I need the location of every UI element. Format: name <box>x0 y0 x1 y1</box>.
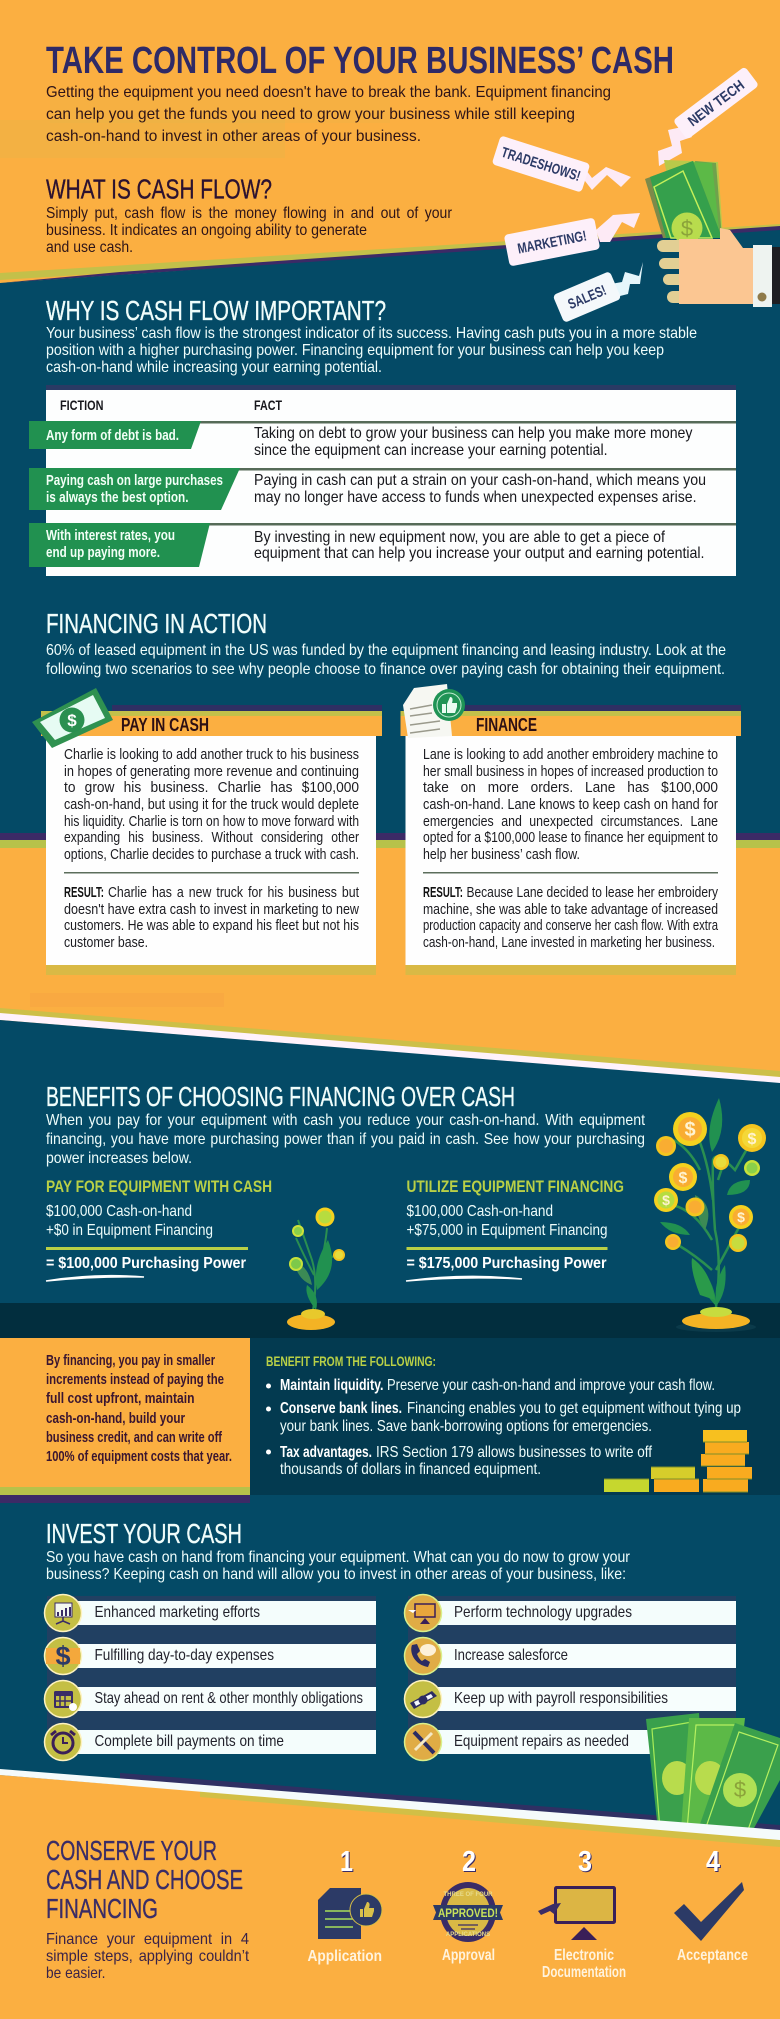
step 3: electronic documentation <box>538 1846 626 1981</box>
row 2: Paying in cash can put a strain on your cash-on-hand, which means you <box>254 472 706 489</box>
bubble: tradeshows <box>492 135 631 193</box>
illustration: three dollar bills <box>646 1713 780 1830</box>
calc: utilize equipment financing: = $175,000 Purchasing Power <box>406 1255 606 1272</box>
item: marketing <box>44 1594 260 1632</box>
text: why cash flow important: Your business’ cash flow is the strongest indicator of its success. Having cash puts you in a more stable <box>46 325 697 342</box>
calc: pay for equipment with cash: PAY FOR EQUIPMENT WITH CASH <box>46 1177 272 1196</box>
step 3: electronic documentation: 3 <box>578 1846 592 1878</box>
item: expenses: $ <box>55 1641 71 1671</box>
step 1: application: Application <box>308 1948 382 1965</box>
bullet: conserve bank lines: Conserve bank lines. <box>280 1400 402 1417</box>
row 2: is always the best option. <box>46 489 188 506</box>
bullet: tax advantages: Tax advantages. <box>280 1444 372 1461</box>
bullet: conserve bank lines <box>266 1400 741 1435</box>
icon: dollar bill: $ <box>67 711 77 730</box>
scenario text: cash-on-hand. Lane knows to keep cash on hand for <box>423 796 718 813</box>
bubble: sales <box>553 262 643 323</box>
bullet: maintain liquidity: Maintain liquidity. <box>280 1377 384 1394</box>
scenario text: to grow his business. Charlie has $100,000 <box>64 779 359 796</box>
result text: machine, she was able to take advantage of increased <box>423 901 718 918</box>
text: benefits intro <box>46 1112 646 1167</box>
panel: finance <box>400 684 741 975</box>
calc: utilize equipment financing: +$75,000 in Equipment Financing <box>406 1222 608 1239</box>
callout: by financing: business credit, and can write off <box>46 1429 223 1446</box>
text: why cash flow important <box>46 325 697 376</box>
calc: utilize equipment financing <box>406 1177 624 1281</box>
result text: Because Lane decided to lease her embroidery <box>466 884 718 901</box>
column headers: FACT <box>254 397 282 413</box>
item: bills <box>44 1724 284 1760</box>
icon: hand and cuff <box>657 228 780 307</box>
calc: utilize equipment financing: UTILIZE EQUIPMENT FINANCING <box>406 1177 624 1196</box>
step 2: approval: Approval <box>442 1947 495 1964</box>
row 2: may no longer have access to funds when unexpected expenses arise. <box>254 489 696 506</box>
step 2: approval: APPROVED! <box>438 1908 498 1920</box>
item: salesforce <box>404 1638 568 1674</box>
text: invest intro <box>46 1549 630 1583</box>
scenario text: Lane is looking to add another embroidery machine to <box>423 746 718 763</box>
item: technology <box>404 1594 632 1632</box>
bubble: new tech: NEW TECH <box>685 78 748 130</box>
item: expenses <box>44 1638 274 1674</box>
scenario text: Charlie is looking to add another truck to his business <box>64 746 359 763</box>
step 1: application: 1 <box>341 1847 354 1879</box>
row 2: Paying cash on large purchases <box>46 472 223 489</box>
item: rent: Stay ahead on rent & other monthly obligations <box>94 1690 363 1707</box>
result text: doesn't have extra cash to invest in marketing to new <box>64 901 359 918</box>
text: benefits intro: financing, you have more purchasing power than if you paid in cash. See how your purchasing <box>46 1131 645 1148</box>
scenario text: help her business’ cash flow. <box>423 846 580 863</box>
text: what is cash flow: and use cash. <box>46 239 133 256</box>
row 3: equipment that can help you increase your output and earning potential. <box>254 545 704 562</box>
heading: conserve your cash: FINANCING <box>46 1893 158 1924</box>
scenario text: in hopes of generating more revenue and continuing <box>64 763 359 780</box>
panel: fiction vs fact table <box>29 385 736 576</box>
result text: RESULT: <box>64 884 104 901</box>
illustration: large money plant: $ <box>684 1119 696 1141</box>
intro text <box>46 84 611 145</box>
list: invest right column <box>404 1594 736 1760</box>
callout: by financing: By financing, you pay in smaller <box>46 1352 215 1369</box>
column headers <box>60 397 282 413</box>
icon: cash stack: $ <box>681 216 693 241</box>
bullet: tax advantages: thousands of dollars in financed equipment. <box>280 1461 541 1478</box>
heading: invest your cash: INVEST YOUR CASH <box>46 1518 242 1549</box>
heading: financing in action: FINANCING IN ACTION <box>46 608 267 639</box>
step 2: approval: 2 <box>463 1847 477 1879</box>
step 2: approval: THREE OF FOUR <box>444 1892 493 1898</box>
calc: pay for equipment with cash: +$0 in Equipment Financing <box>46 1222 213 1239</box>
item: repairs <box>404 1724 629 1760</box>
illustration: hand holding cash with speech bubbles <box>492 66 780 323</box>
item: rent <box>44 1680 363 1718</box>
strip: bottom white edge <box>0 1769 780 1840</box>
text: conserve: be easier. <box>46 1965 106 1982</box>
callout: by financing: increments instead of paying the <box>46 1371 224 1388</box>
callout: by financing: full cost upfront, maintain <box>46 1390 194 1407</box>
scenario text: her small business in hopes of increased production to <box>423 763 718 780</box>
section background: benefits and invest teal <box>0 1008 780 1845</box>
heading: benefits: BENEFITS OF CHOOSING FINANCING OVER CASH <box>46 1081 515 1112</box>
row 1: since the equipment can increase your earning potential. <box>254 442 608 459</box>
step 2: approval: 2 <box>462 1846 476 1878</box>
panel: benefit list: BENEFIT FROM THE FOLLOWING: <box>266 1353 436 1369</box>
scenario text: take on more orders. Lane has $100,000 <box>423 779 718 796</box>
heading: FINANCE <box>476 714 537 735</box>
calc: pay for equipment with cash <box>46 1177 272 1281</box>
step 2: approval <box>433 1846 503 1964</box>
bullet: conserve bank lines: your bank lines. Save bank-borrowing options for emergencies. <box>280 1418 652 1435</box>
bullet: tax advantages <box>266 1444 653 1478</box>
icon: cash stack <box>645 160 723 244</box>
step 3: electronic documentation: Documentation <box>542 1964 626 1981</box>
bubble: marketing <box>504 213 640 266</box>
calc: pay for equipment with cash: $100,000 Cash-on-hand <box>46 1203 192 1220</box>
scenario text: his liquidity. Charlie is torn on how to move forward with <box>64 813 359 830</box>
scenario text: cash-on-hand, but using it for the truck would deplete <box>64 796 359 813</box>
item: expenses: Fulfilling day-to-day expenses <box>94 1647 274 1664</box>
panel: pay in cash <box>32 688 382 975</box>
text: invest intro: So you have cash on hand from financing your equipment. What can you do now to grow your <box>46 1549 630 1566</box>
illustration: small money plant <box>287 1208 345 1330</box>
item: payroll: Keep up with payroll responsibilities <box>454 1690 668 1707</box>
text: financing in action <box>46 642 726 678</box>
intro text: can help you get the funds you need to grow your business while still keeping <box>46 106 575 123</box>
result text <box>64 884 360 951</box>
heading: what is cash flow: WHAT IS CASH FLOW? <box>46 174 272 204</box>
item: salesforce: Increase salesforce <box>454 1647 568 1664</box>
result text: Charlie has a new truck for his business but <box>108 884 360 901</box>
step 1: application <box>308 1846 382 1965</box>
step 4: acceptance <box>674 1846 748 1964</box>
illustration: coin stacks <box>604 1430 752 1492</box>
result text: customer base. <box>64 934 148 951</box>
column headers: FICTION <box>60 397 104 413</box>
result text: RESULT: <box>423 884 463 901</box>
text: benefits intro: power increases below. <box>46 1150 192 1167</box>
bubble: tradeshows: TRADESHOWS! <box>499 145 582 185</box>
text: conserve <box>46 1931 250 1982</box>
section cover: orange bottom <box>0 1775 780 2019</box>
heading: why is cash flow important: WHY IS CASH FLOW IMPORTANT? <box>46 295 386 326</box>
text: conserve: simple steps, applying couldn’t <box>46 1948 250 1965</box>
callout: by financing: 100% of equipment costs that year. <box>46 1448 232 1465</box>
result text <box>423 884 718 951</box>
bullet: maintain liquidity <box>266 1377 715 1394</box>
row 1: Taking on debt to grow your business can help you make more money <box>254 425 693 442</box>
section background: teal diagonal top <box>0 224 780 848</box>
bubble: new tech <box>658 66 759 166</box>
illustration: large money plant <box>654 1098 766 1332</box>
step 4: acceptance: 4 <box>706 1846 720 1878</box>
heading: PAY IN CASH <box>121 714 209 735</box>
calc: pay for equipment with cash: = $100,000 Purchasing Power <box>46 1255 246 1272</box>
text: what is cash flow <box>46 205 452 256</box>
heading: conserve your cash: CASH AND CHOOSE <box>46 1864 243 1895</box>
step 2: approval: APPLICATIONS <box>446 1932 490 1938</box>
step 4: acceptance: 4 <box>707 1847 721 1879</box>
item: technology: Perform technology upgrades <box>454 1604 632 1621</box>
item: bills: Complete bill payments on time <box>94 1733 284 1750</box>
icon: document with thumbs up seal <box>403 684 465 738</box>
bubble: sales: SALES! <box>566 283 609 313</box>
text: conserve: Finance your equipment in 4 <box>46 1931 249 1948</box>
text: what is cash flow: Simply put, cash flow is the money flowing in and out of your <box>46 205 452 222</box>
illustration: large money plant: $ <box>748 1131 757 1148</box>
row 3: By investing in new equipment now, you are able to get a piece of <box>254 529 666 546</box>
result text: customers. He was able to expand his fleet but not his <box>64 917 359 934</box>
text: why cash flow important: position with a higher purchasing power. Financing equipment for your business can help you keep <box>46 342 664 359</box>
intro text: Getting the equipment you need doesn't have to break the bank. Equipment financing <box>46 84 611 101</box>
scenario text: expanding his business. Without considering other <box>64 829 359 846</box>
step 3: electronic documentation: Electronic <box>554 1947 614 1964</box>
intro text: cash-on-hand to invest in other areas of your business. <box>46 128 421 145</box>
text: invest intro: business? Keeping cash on hand will allow you to invest in other areas of your business, like: <box>46 1566 626 1583</box>
heading: conserve your cash: CONSERVE YOUR <box>46 1835 217 1866</box>
item: repairs: Equipment repairs as needed <box>454 1733 629 1750</box>
text: what is cash flow: business. It indicates an ongoing ability to generate <box>46 222 367 239</box>
row 3 <box>29 523 704 567</box>
panel: benefit list <box>266 1353 741 1478</box>
illustration: large money plant: $ <box>662 1192 670 1208</box>
row 2 <box>29 468 706 510</box>
row 3: end up paying more. <box>46 544 160 561</box>
scenario text <box>423 746 718 863</box>
callout: by financing: cash-on-hand, build your <box>46 1410 185 1427</box>
step 1: application: 1 <box>340 1846 353 1878</box>
item: marketing: Enhanced marketing efforts <box>94 1604 260 1621</box>
item: payroll <box>404 1680 668 1718</box>
text: financing in action: following two scenarios to see why people choose to finance over paying cash for obtaining their equipment. <box>46 661 725 678</box>
text: why cash flow important: cash-on-hand while increasing your earning potential. <box>46 359 382 376</box>
scenario text <box>64 746 359 863</box>
row 1 <box>29 421 693 459</box>
illustration: three dollar bills: $ <box>734 1777 746 1802</box>
bubble: marketing: MARKETING! <box>516 228 588 258</box>
strip: olive edge <box>200 1791 780 1847</box>
callout: by financing <box>46 1352 232 1465</box>
heading: conserve your cash <box>46 1835 243 1924</box>
scenario text: options, Charlie decides to purchase a truck with cash. <box>64 846 359 863</box>
list: invest left column <box>44 1594 376 1760</box>
row 1: Any form of debt is bad. <box>46 427 179 444</box>
bullet: tax advantages: IRS Section 179 allows businesses to write off <box>376 1444 653 1461</box>
step 4: acceptance: Acceptance <box>677 1947 748 1964</box>
illustration: large money plant: $ <box>679 1170 688 1187</box>
step 3: electronic documentation: 3 <box>579 1847 593 1879</box>
illustration: large money plant: $ <box>737 1209 745 1225</box>
bullet: maintain liquidity: Preserve your cash-on-hand and improve your cash flow. <box>387 1377 715 1394</box>
text: benefits intro: When you pay for your equipment with cash you reduce your cash-on-hand. With equipment <box>46 1112 646 1129</box>
row 3: With interest rates, you <box>46 527 175 544</box>
calc: utilize equipment financing: $100,000 Cash-on-hand <box>406 1203 553 1220</box>
icon: dollar bill <box>32 688 113 748</box>
scenario text: emergencies and unexpected circumstances. Lane <box>423 813 718 830</box>
